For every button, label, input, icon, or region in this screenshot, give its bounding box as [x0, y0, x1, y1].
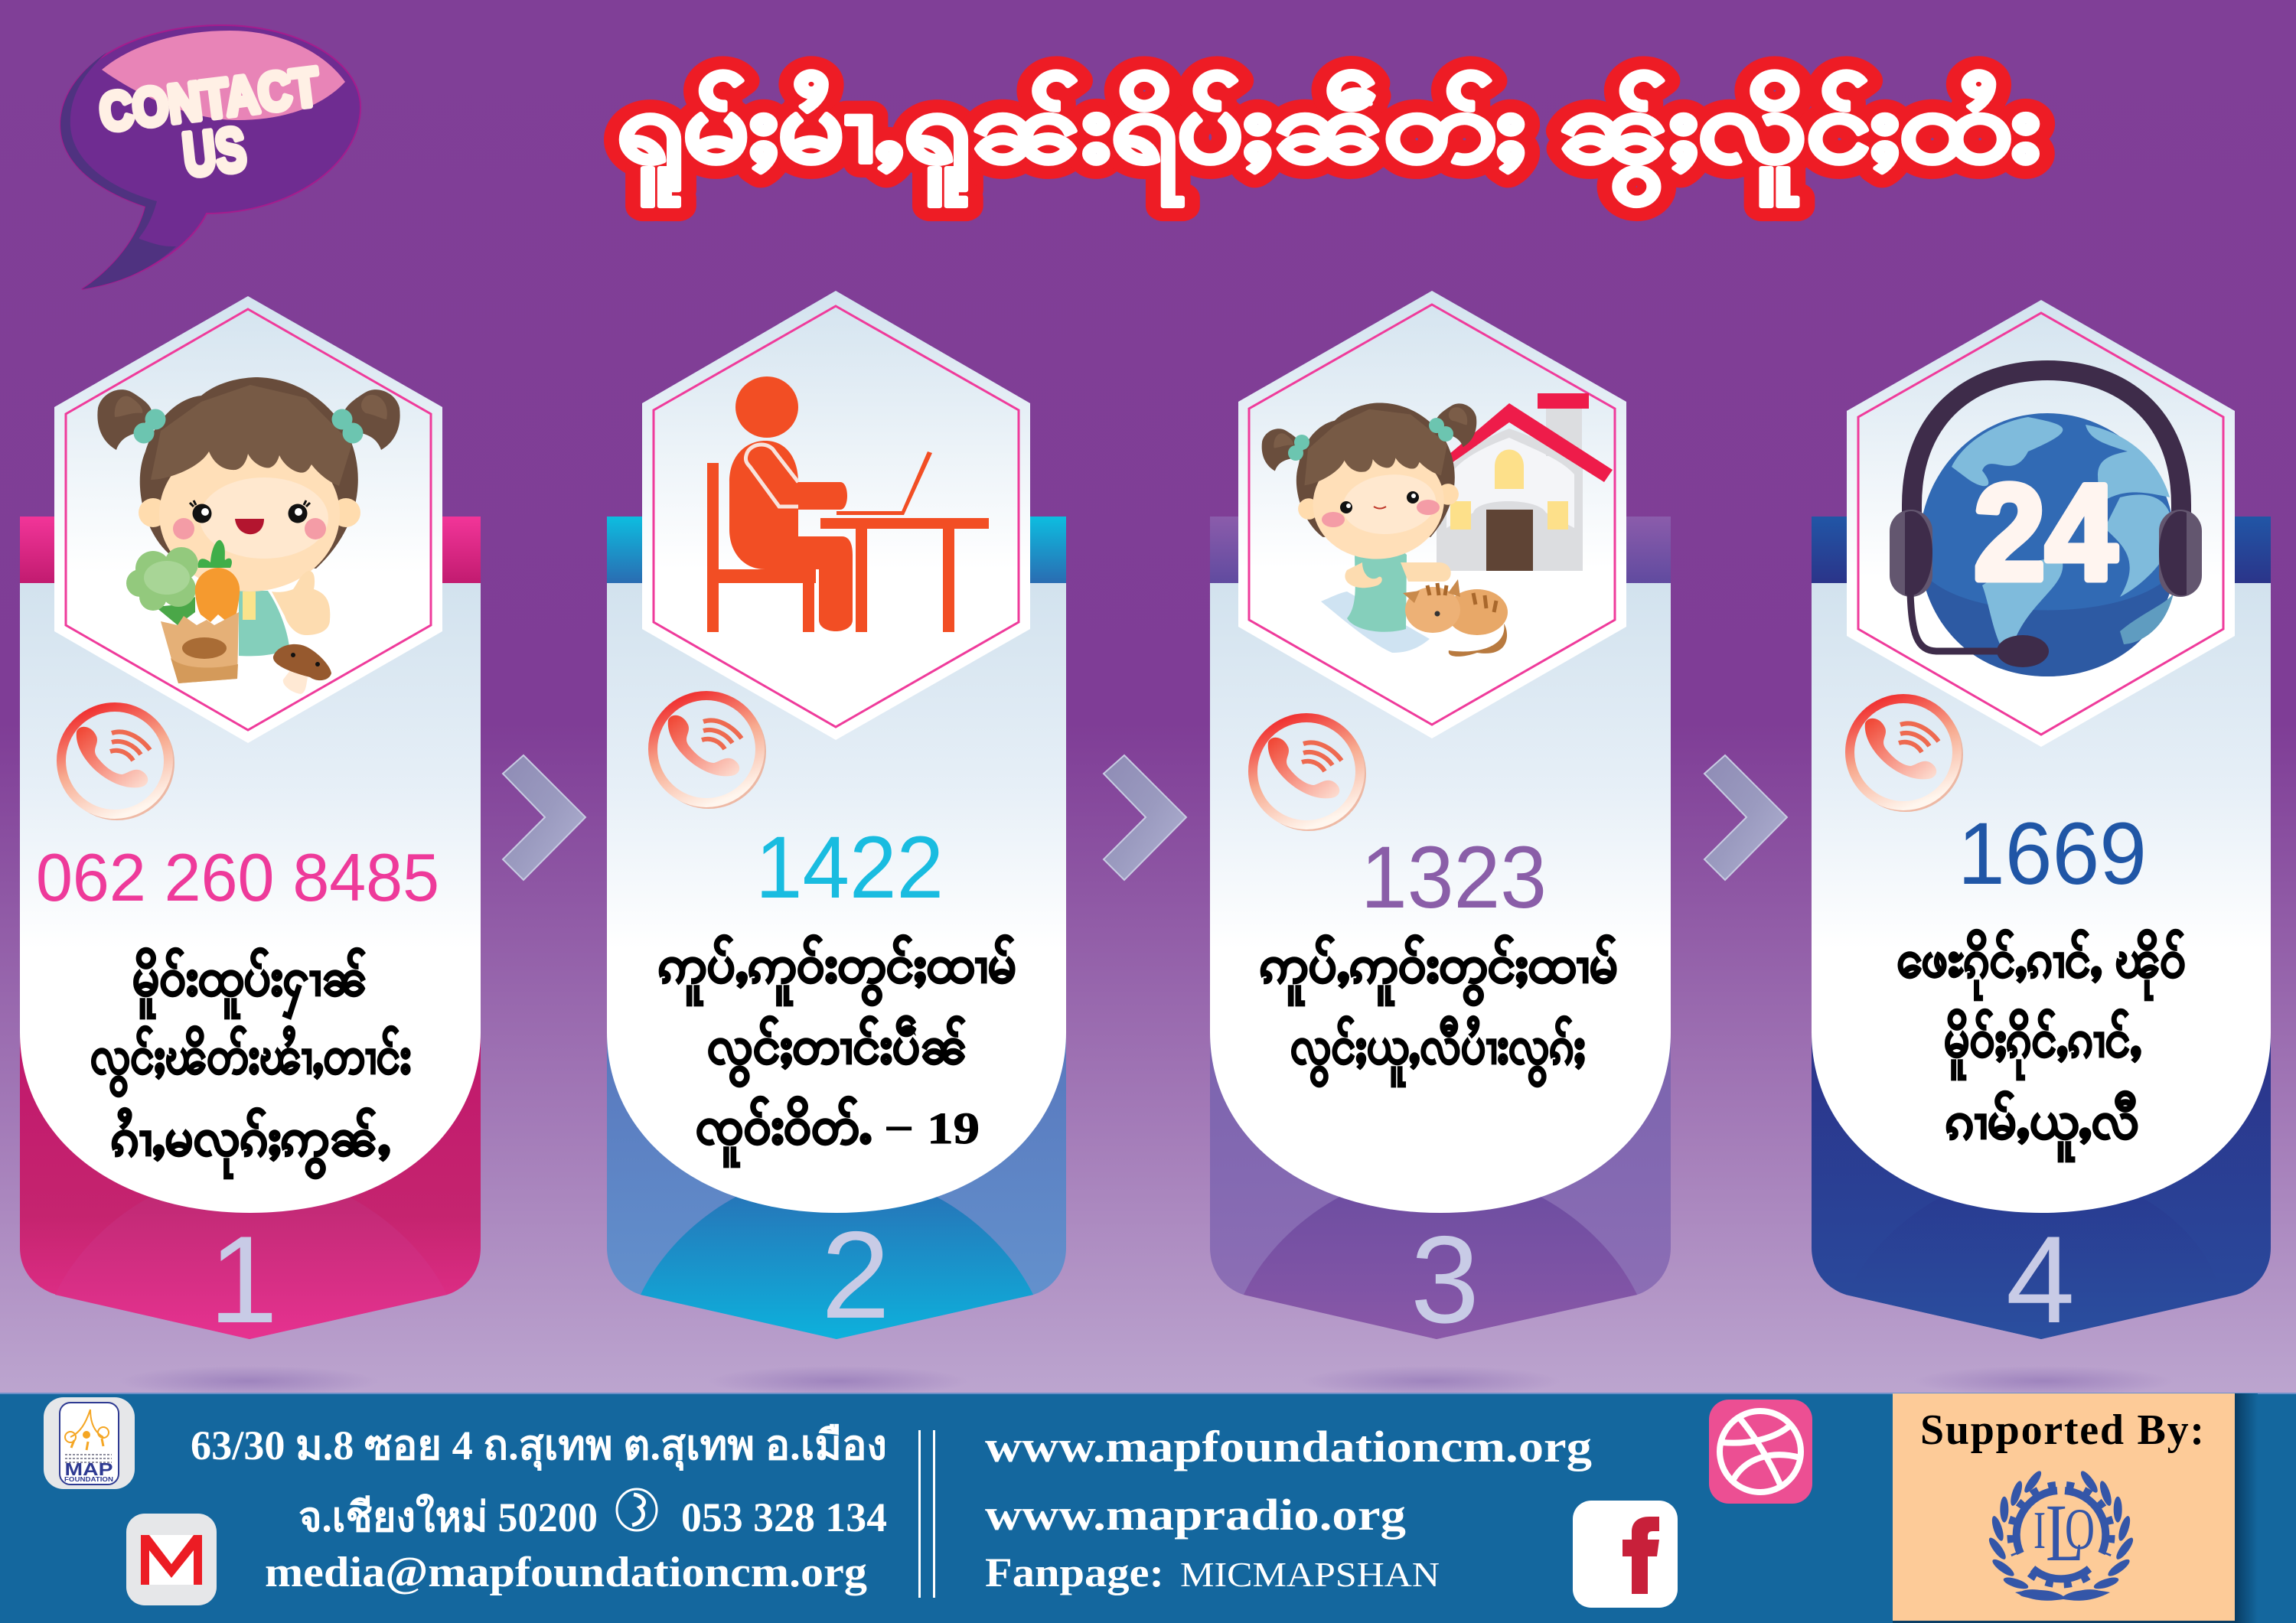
icon: telephone in ring	[617, 1489, 657, 1530]
icon: phone	[1850, 699, 1961, 810]
arrow 1	[503, 755, 585, 880]
step number 2: 2	[821, 1206, 890, 1344]
description text: ဢူပ်ႇဢူဝ်းတွင်ႈထၢမ်	[658, 934, 1016, 1006]
email text: media@mapfoundationcm.org	[265, 1549, 867, 1596]
arrow 2	[1104, 755, 1186, 880]
description text: ဢူပ်ႇဢူဝ်းတွင်ႈထၢမ်	[1260, 934, 1618, 1006]
description text: ဖေႊၵိုင်ႇၵၢင်ႇ ၽိုဝ်	[1896, 929, 2186, 1001]
icon: MAP foundation logo: MAP	[64, 1459, 113, 1479]
description text: လွင်ႈတၢင်းပဵၼ်	[707, 1015, 967, 1087]
hexagon frame	[54, 296, 442, 743]
illustration: girl with house and cat	[1262, 393, 1613, 657]
fanpage label: Fanpage:	[985, 1550, 1164, 1595]
address text: 63/30 ม.8 ซอย 4 ถ.สุเทพ ต.สุเทพ อ.เมือง	[191, 1423, 887, 1471]
hexagon frame	[1238, 291, 1626, 738]
panel: card 4	[1812, 300, 2271, 1349]
description text	[658, 934, 1016, 1168]
description text: လွင်ႈၽိတ်းၽၢႆႇတၢင်း	[90, 1025, 411, 1097]
description text: − 19	[884, 1103, 980, 1153]
phone text: 053 328 134	[681, 1494, 887, 1540]
icon: facebook	[1573, 1501, 1678, 1608]
icon: dribbble	[1709, 1400, 1812, 1504]
supporter box	[1893, 1393, 2258, 1623]
description text: ၸူဝ်းဝိတ်ႉ	[696, 1096, 872, 1168]
icon: ILO emblem: L	[2046, 1488, 2084, 1579]
description text: ၵၢႆႇမလုၵ်ႈဢွၼ်ႇ	[111, 1107, 390, 1179]
website text 2: www.mapradio.org	[985, 1490, 1406, 1540]
arrow 3	[1704, 755, 1787, 880]
description text: လွင်ႈယူႇလီပၢႆးလွၵ်ႈ	[1290, 1015, 1585, 1087]
icon: phone	[653, 696, 764, 807]
card shadows	[119, 1366, 2174, 1396]
supported by text: Supported By:	[1920, 1406, 2204, 1454]
illustration: girl with vegetables	[97, 377, 400, 694]
step number 3: 3	[1411, 1211, 1479, 1349]
icon: gmail	[126, 1514, 217, 1605]
icon: phone	[1253, 718, 1364, 829]
icon: ILO emblem: O	[2065, 1498, 2095, 1562]
icon: ILO emblem: I	[2033, 1501, 2046, 1560]
icon: person at laptop	[707, 376, 989, 632]
hexagon frame	[1847, 300, 2235, 747]
contact text: CONTACT	[96, 57, 322, 142]
phone number: 1669	[1958, 805, 2147, 903]
description text: ၵၢမ်ႇယူႇလီ	[1945, 1090, 2139, 1162]
phone number: 1422	[755, 819, 944, 917]
icon: phone	[61, 707, 172, 818]
icon: ILO emblem	[1986, 1469, 2136, 1601]
panel: card 1	[20, 296, 481, 1349]
panel: card 2	[607, 291, 1066, 1344]
phone number: 1323	[1361, 829, 1547, 927]
step number 4: 4	[2006, 1211, 2075, 1349]
description text	[1260, 934, 1618, 1087]
title: ရူမ်ႈမႆၢႇရူၼ်းရိပ်ႈၼဵတ်ႈ ၼွ်ႈလိူင်ႈထႆး	[617, 70, 2040, 207]
website text 1: www.mapfoundationcm.org	[985, 1422, 1592, 1471]
description text	[90, 947, 411, 1179]
icon: globe with headset	[1890, 370, 2202, 676]
fanpage name: MICMAPSHAN	[1180, 1555, 1440, 1594]
description text	[1896, 929, 2186, 1162]
step number 1: 1	[209, 1211, 278, 1349]
24 label: 24	[1974, 456, 2117, 608]
hexagon frame	[642, 291, 1030, 740]
contact us speech bubble	[60, 25, 360, 289]
panel: card 3	[1210, 291, 1671, 1349]
icon: MAP foundation logo	[44, 1397, 135, 1489]
us text: US	[180, 115, 249, 189]
title: ရူမ်ႈမႆၢႇရူၼ်းရိပ်ႈၼဵတ်ႈ ၼွ်ႈလိူင်ႈထႆး	[617, 70, 2040, 207]
phone number: 062 260 8485	[36, 839, 439, 915]
description text: မိူဝ်းထူပ်းႁၢၼ်	[132, 947, 367, 1019]
panel: footer	[0, 1393, 2296, 1623]
description text: မိူဝ်ႈၵိုင်ႇၵၢင်ႇ	[1944, 1009, 2141, 1080]
icon: MAP foundation logo: FOUNDATION	[64, 1476, 113, 1483]
province text: จ.เชียงใหม่ 50200	[298, 1493, 598, 1540]
